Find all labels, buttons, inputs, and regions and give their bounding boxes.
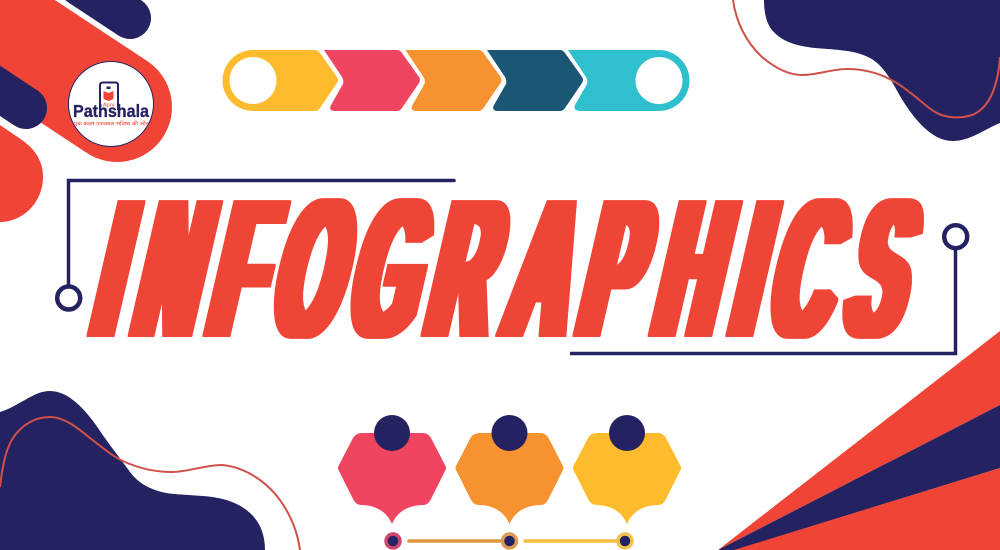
connector: yellow: [525, 539, 622, 543]
decoration: top-left red pill: [0, 0, 117, 107]
hexagon: orange: [456, 415, 564, 524]
timeline connectors: [386, 534, 632, 548]
logo: Apni Pathshala: [68, 62, 154, 146]
top arrow process bar: [223, 50, 689, 111]
decoration: top-left navy pill: [80, 0, 130, 18]
frame: top-left bracket: [57, 180, 454, 310]
decoration: bottom-right red wedge lower: [734, 468, 1000, 550]
step 2: pink: [324, 50, 420, 111]
hexagon: pink: [338, 415, 446, 524]
left white circle: [230, 57, 276, 104]
dot: orange: [502, 534, 516, 548]
step 5: teal: [568, 50, 689, 111]
step 1: yellow: [223, 50, 338, 111]
logo tagline: एक कदम उज्जवल भविष्य की ओर: [74, 120, 149, 128]
title: INFOGRAPHICS: [79, 159, 937, 378]
decoration: bottom-right navy wedge: [718, 405, 1000, 550]
decoration: bottom-right red wedge upper: [718, 331, 1000, 550]
step 3: orange: [406, 50, 502, 111]
decoration: bottom-left navy blob: [0, 391, 265, 550]
dot: pink: [386, 534, 400, 548]
decoration: top-right red curve: [733, 0, 1000, 117]
right white circle: [636, 57, 682, 104]
decoration: top-right navy blob: [764, 0, 1000, 141]
hexagon: yellow: [573, 415, 681, 524]
step 4: dark teal: [487, 50, 583, 111]
connector: orange: [409, 539, 505, 543]
decoration: left red blob: [0, 125, 43, 222]
icon: phone with book: Apni: [103, 102, 114, 108]
decoration: bottom-left red curve: [0, 417, 300, 550]
logo wordmark: Pathshala: [73, 101, 149, 121]
dot: yellow: [618, 534, 632, 548]
decoration: left navy pill: [0, 71, 26, 108]
frame: bottom-right bracket: [570, 225, 967, 354]
hexagon markers row: [338, 415, 681, 524]
